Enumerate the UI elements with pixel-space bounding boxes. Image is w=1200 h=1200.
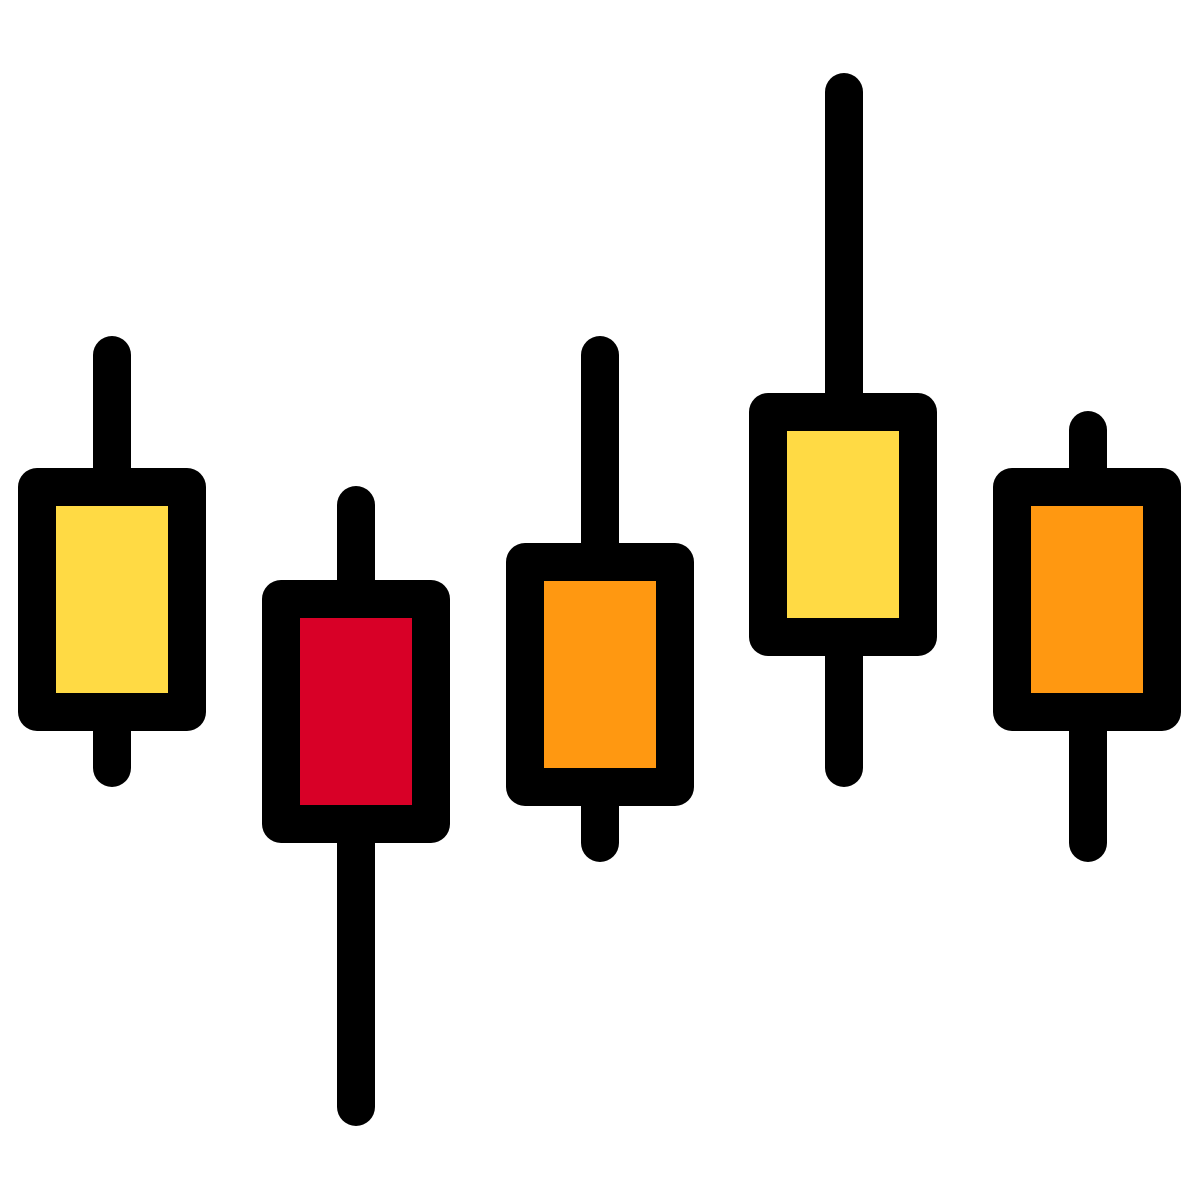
candle 3: orange <box>525 355 675 843</box>
candle 2: red <box>281 505 431 1107</box>
candle 4: yellow <box>768 92 918 768</box>
candle 1: yellow <box>37 355 187 768</box>
candle 5: orange <box>1012 430 1162 843</box>
